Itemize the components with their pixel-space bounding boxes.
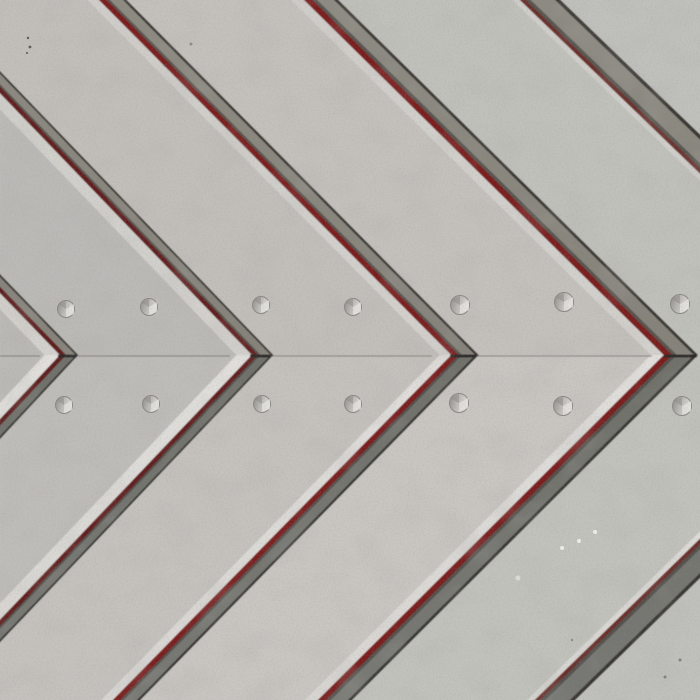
rivets: lower row <box>56 394 692 416</box>
horizontal seam between boards <box>0 355 697 357</box>
chevron D: far left groove <box>0 225 77 490</box>
rivets: upper row <box>58 292 690 318</box>
chevron B: centre groove <box>0 0 477 700</box>
chevron C: left groove <box>0 0 272 665</box>
